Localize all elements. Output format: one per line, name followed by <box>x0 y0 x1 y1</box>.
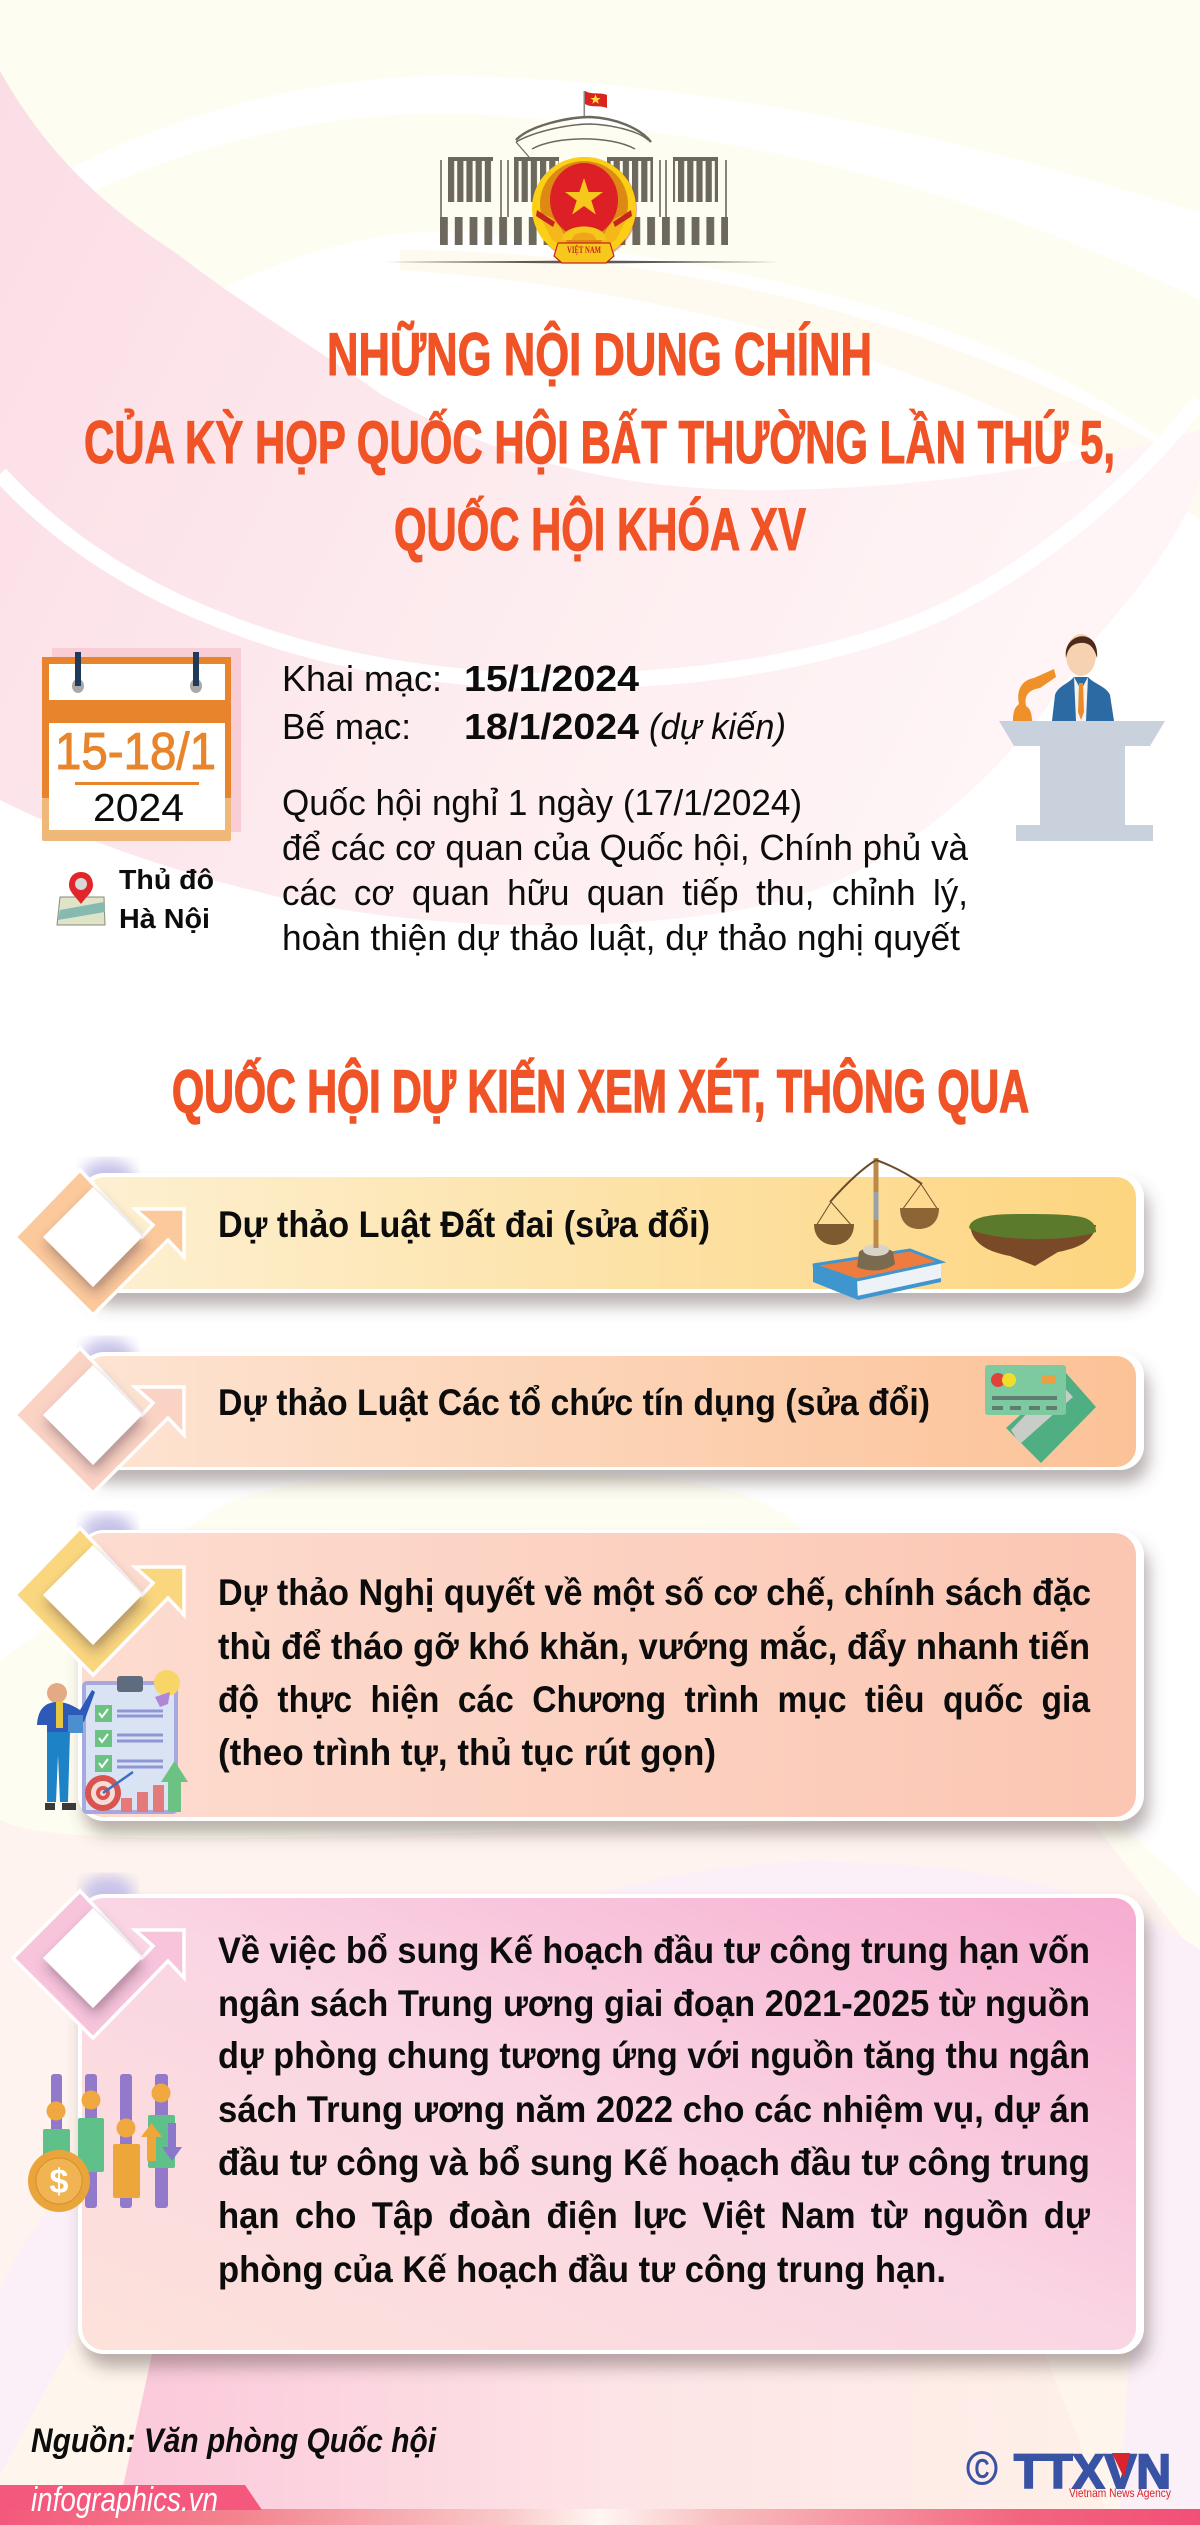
session dates and note <box>282 658 969 958</box>
logo: TTXVN Vietnam News Agency: C <box>974 2453 990 2484</box>
logo: TTXVN Vietnam News Agency: TTXVN <box>1014 2446 1171 2499</box>
session dates and note: (dự kiến) <box>649 706 786 747</box>
text <box>218 1572 1091 1773</box>
session dates and note: để các cơ quan của Quốc hội, Chính phủ và <box>282 827 969 868</box>
icon: dome <box>516 117 651 157</box>
text: Về việc bổ sung Kế hoạch đầu tư công trung hạn vốn <box>218 1930 1090 1971</box>
footer bar <box>0 2509 1200 2525</box>
panel: draft Land Law <box>15 1158 1144 1315</box>
icon: diamond arrow <box>15 1348 184 1493</box>
text: đầu tư công và bổ sung Kế hoạch đầu tư công trung <box>218 2142 1090 2183</box>
session dates and note: Bế mạc: <box>282 706 411 747</box>
icon: flag <box>584 91 607 117</box>
text <box>218 1930 1090 2290</box>
colonnade <box>440 157 728 245</box>
location: Thủ đô Hà Nội: Thủ đô <box>119 864 214 895</box>
panel: supplement to the medium-term public investment plan <box>13 1876 1144 2354</box>
text: Dự thảo Luật Các tổ chức tín dụng (sửa đổi) <box>218 1382 930 1423</box>
session dates and note: hoàn thiện dự thảo luật, dự thảo nghị quyết <box>282 917 960 958</box>
text: độ thực hiện các Chương trình mục tiêu quốc gia <box>218 1679 1090 1720</box>
session dates and note: các cơ quan hữu quan tiếp thu, chỉnh lý, <box>282 872 968 913</box>
icon: calendar 15-18/1 2024: 2024 <box>93 787 184 830</box>
logo: TTXVN Vietnam News Agency: Vietnam News Agency <box>1069 2486 1171 2500</box>
location: Thủ đô Hà Nội: Hà Nội <box>119 903 210 934</box>
footer tab: infographics.vn: infographics.vn <box>31 2481 218 2519</box>
text: Dự thảo Luật Đất đai (sửa đổi) <box>218 1204 710 1245</box>
text: Dự thảo Nghị quyết về một số cơ chế, chính sách đặc <box>218 1572 1091 1613</box>
text: ngân sách Trung ương giai đoạn 2021-2025 từ nguồn <box>218 1983 1090 2024</box>
icon: candlestick chart with coin <box>28 2074 182 2212</box>
icon: calendar 15-18/1 2024 <box>42 648 241 841</box>
title: QUỐC HỘI KHÓA XV <box>394 496 806 563</box>
icon: man presenting a checklist <box>37 1670 188 1812</box>
session dates and note: Khai mạc: <box>282 658 442 699</box>
location: Thủ đô Hà Nội <box>57 864 214 934</box>
text: phòng của Kế hoạch đầu tư công trung hạn. <box>218 2249 946 2290</box>
text: dự phòng chung tương ứng với nguồn tăng thu ngân <box>218 2035 1090 2076</box>
text: thù để tháo gỡ khó khăn, vướng mắc, đẩy nhanh tiến <box>218 1625 1090 1667</box>
panel: draft Law on Credit Institutions <box>15 1339 1144 1493</box>
icon: map pin <box>57 872 105 925</box>
icon: national emblem: VIỆT NAM <box>567 245 601 255</box>
session dates and note: Quốc hội nghỉ 1 ngày (17/1/2024) <box>282 782 802 823</box>
panel: draft Resolution on national target programmes <box>15 1514 1144 1821</box>
icon: National Assembly building with national emblem <box>386 91 780 264</box>
title <box>84 321 1115 563</box>
icon: diamond arrow <box>15 1170 184 1315</box>
ground line <box>386 260 780 264</box>
icon: speaker at podium <box>999 634 1165 841</box>
icon: scales of justice on a book <box>813 1158 941 1300</box>
icon: diamond arrow <box>15 1528 184 1675</box>
icon: candlestick chart with coin: $ <box>50 2163 69 2201</box>
session dates and note: 15/1/2024 <box>464 658 639 699</box>
session dates and note: 18/1/2024 <box>464 706 639 747</box>
source note: Nguồn: Văn phòng Quốc hội <box>31 2422 437 2460</box>
title: NHỮNG NỘI DUNG CHÍNH <box>327 321 872 388</box>
icon: land plot <box>969 1214 1096 1266</box>
icon: diamond arrow <box>13 1891 184 2038</box>
text: sách Trung ương năm 2022 cho các nhiệm vụ, dự án <box>218 2089 1090 2130</box>
icon: calendar 15-18/1 2024: 15-18/1 <box>55 723 216 781</box>
text: (theo trình tự, thủ tục rút gọn) <box>218 1732 716 1773</box>
text: hạn cho Tập đoàn điện lực Việt Nam từ nguồn dự <box>218 2195 1090 2236</box>
icon: bank cards <box>985 1365 1096 1463</box>
icon: national emblem <box>532 157 637 263</box>
